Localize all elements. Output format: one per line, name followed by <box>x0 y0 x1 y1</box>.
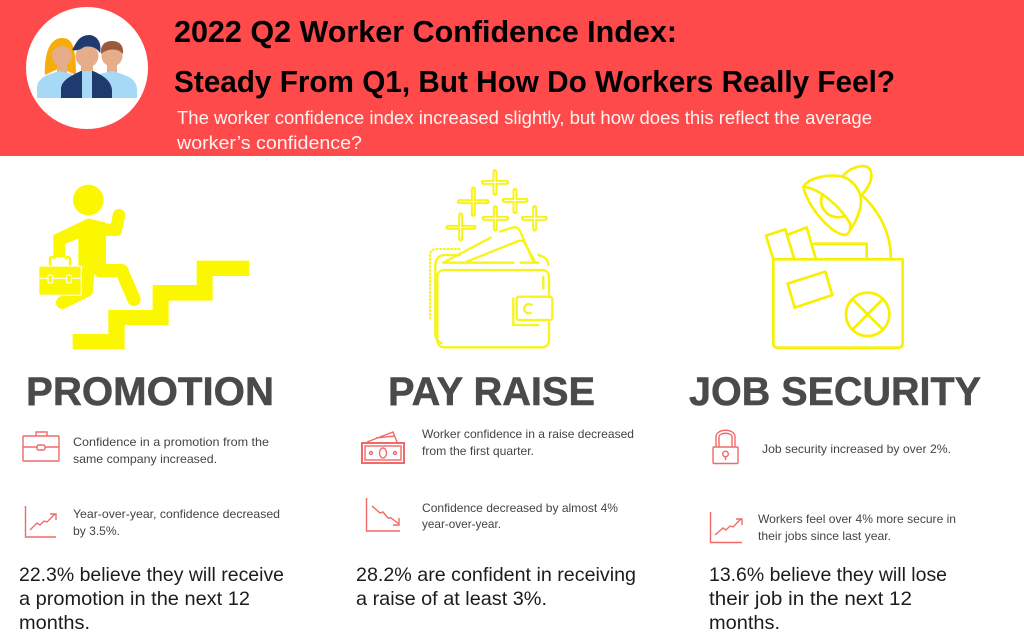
subtitle: worker’s confidence? <box>176 132 362 153</box>
text: promotion confidence: Confidence in a promotion from the <box>73 435 269 449</box>
icon: three workers in a circle <box>26 7 148 129</box>
panel: promotion <box>19 185 284 634</box>
text: promotion year over year: by 3.5%. <box>73 524 120 538</box>
text: promotion year over year <box>73 507 280 538</box>
panel: pay raise <box>356 172 636 610</box>
icon: briefcase <box>23 432 59 461</box>
text: raise statistic: 28.2% are confident in receiving <box>356 564 636 586</box>
icon: banknotes <box>362 432 404 463</box>
text: promotion statistic <box>19 564 284 634</box>
text: promotion statistic: months. <box>19 612 90 634</box>
subtitle <box>176 107 872 153</box>
heading: pay raise: PAY RAISE <box>388 370 595 414</box>
text: job security statistic <box>709 564 947 634</box>
text: promotion year over year: Year-over-year, confidence decreased <box>73 507 280 521</box>
title: 2022 Q2 Worker Confidence Index: <box>174 15 677 49</box>
text: job security statistic: months. <box>709 612 780 634</box>
icon: falling chart <box>366 498 400 531</box>
icon: padlock <box>713 430 738 464</box>
title: Steady From Q1, But How Do Workers Really Feel? <box>174 65 895 99</box>
text: raise statistic: a raise of at least 3%. <box>356 588 547 610</box>
text: raise confidence: from the first quarter. <box>422 444 534 458</box>
text: raise confidence <box>422 427 634 458</box>
text: raise statistic <box>356 564 636 610</box>
subtitle: The worker confidence index increased slightly, but how does this reflect the average <box>177 107 872 128</box>
text: raise year over year: Confidence decreased by almost 4% <box>422 501 618 515</box>
text: job security year over year: their jobs since last year. <box>758 529 891 543</box>
icon: box with desk lamp <box>766 166 903 348</box>
icon: worker climbing stairs <box>39 185 249 349</box>
text: promotion confidence <box>73 435 269 466</box>
text: job security statistic: 13.6% believe they will lose <box>709 564 947 586</box>
header banner <box>0 0 1024 156</box>
title <box>174 15 895 99</box>
text: job security year over year: Workers feel over 4% more secure in <box>758 512 956 526</box>
heading: job security: JOB SECURITY <box>689 370 981 414</box>
text: promotion confidence: same company increased. <box>73 452 217 466</box>
text: raise year over year: year-over-year. <box>422 517 501 531</box>
icon: rising chart <box>710 512 742 542</box>
text: promotion statistic: 22.3% believe they will receive <box>19 564 284 586</box>
text: job security increase: Job security increased by over 2%. <box>762 442 951 456</box>
text: raise year over year <box>422 501 618 531</box>
icon: rising chart <box>26 506 56 537</box>
panel: job security <box>689 166 981 634</box>
text: raise confidence: Worker confidence in a raise decreased <box>422 427 634 441</box>
icon: wallet with plus signs <box>430 172 552 347</box>
heading: promotion: PROMOTION <box>26 370 274 414</box>
text: promotion statistic: a promotion in the next 12 <box>19 588 250 610</box>
text: job security year over year <box>758 512 956 543</box>
text: job security statistic: their job in the next 12 <box>709 588 912 610</box>
